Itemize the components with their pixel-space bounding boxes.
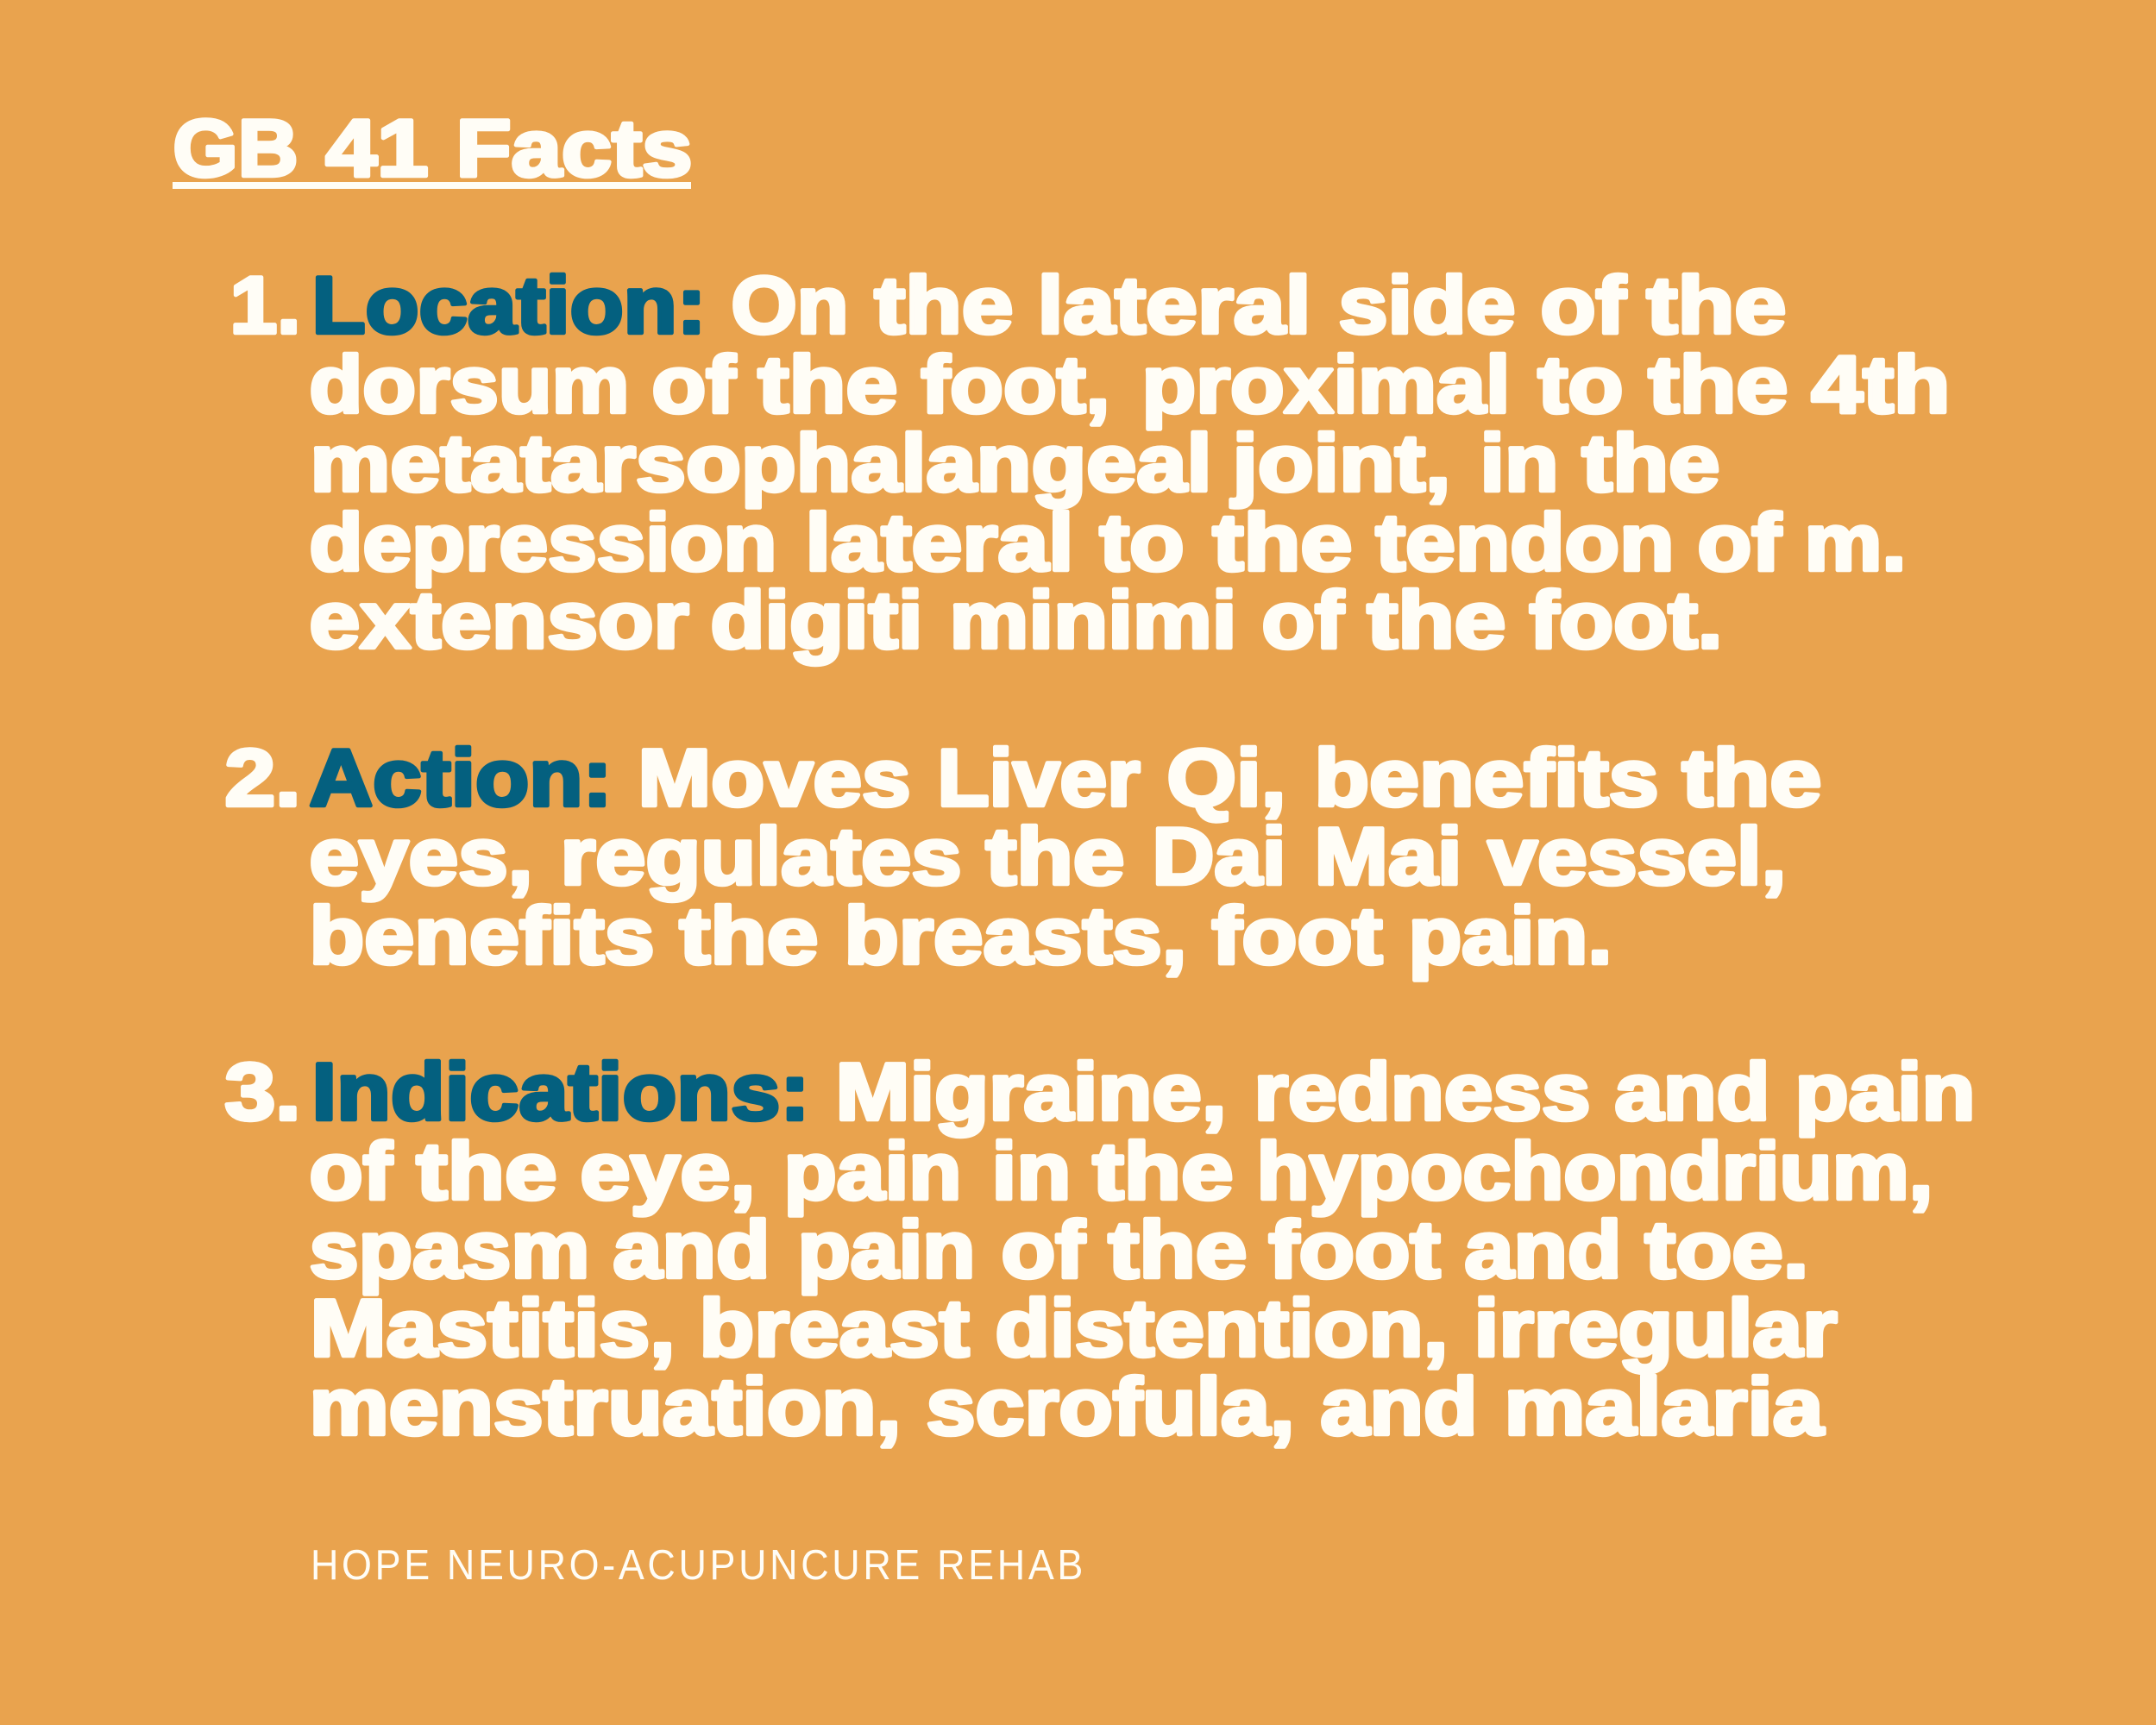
- indications description: irregular: [1474, 1283, 1838, 1373]
- location description: On: [732, 260, 849, 350]
- action description: Liver: [937, 732, 1141, 823]
- location description: lateral: [1037, 260, 1311, 350]
- location description: extensor: [309, 574, 688, 665]
- indications description: distention,: [996, 1283, 1448, 1373]
- action description: benefits: [309, 890, 654, 981]
- title: GB 41 Facts: [173, 103, 692, 193]
- location description: the: [1646, 260, 1786, 350]
- location description: m.: [1805, 497, 1907, 587]
- panel: fact 1 location: [229, 260, 1950, 665]
- title: GB 41 Facts: Facts: [456, 103, 692, 193]
- indications description: malaria: [1505, 1361, 1824, 1452]
- indications description: [309, 1046, 1976, 1452]
- action description: benefits: [1315, 732, 1658, 823]
- number 2: 2.: [224, 732, 300, 823]
- location description: [309, 260, 1950, 665]
- location description: to: [1099, 497, 1184, 587]
- location description: lateral: [806, 497, 1073, 587]
- action description: the: [680, 890, 818, 981]
- number 3: 3.: [224, 1046, 300, 1137]
- title: GB 41 Facts: GB: [173, 103, 299, 193]
- location description: digiti: [711, 574, 923, 665]
- action description: the: [1682, 732, 1822, 823]
- indications description: scrofula,: [927, 1361, 1294, 1452]
- location description: foot.: [1529, 574, 1722, 665]
- panel: fact 3 indications: [224, 1046, 1976, 1452]
- location description: of: [652, 339, 736, 430]
- action description: breasts,: [844, 890, 1187, 981]
- indications description: of: [309, 1126, 393, 1216]
- label: Action: Action:: [309, 732, 613, 823]
- location description: minimi: [949, 574, 1237, 665]
- action description: Mai: [1315, 811, 1461, 901]
- action description: vessel,: [1487, 811, 1786, 901]
- action description: Qi,: [1166, 732, 1285, 823]
- indications description: pain: [797, 1204, 975, 1295]
- indications description: pain: [783, 1126, 961, 1216]
- indications description: the: [416, 1126, 557, 1216]
- location description: the: [1367, 574, 1506, 665]
- location description: joint,: [1230, 417, 1451, 508]
- action description: eyes,: [309, 811, 533, 901]
- indications description: and: [1320, 1361, 1477, 1452]
- indications description: and: [1615, 1046, 1770, 1137]
- indications description: the: [1092, 1126, 1234, 1216]
- indications description: the: [1108, 1204, 1248, 1295]
- indications description: foot: [1268, 1204, 1441, 1295]
- location description: of: [1261, 574, 1344, 665]
- location description: depression: [309, 497, 776, 587]
- location description: of: [1541, 260, 1626, 350]
- label: Location: Location:: [312, 260, 706, 350]
- location description: dorsum: [309, 339, 630, 430]
- indications description: and: [1465, 1204, 1622, 1295]
- location description: metatarsophalangeal: [311, 417, 1211, 508]
- indications description: hypochondrium,: [1256, 1126, 1933, 1216]
- location description: tendon: [1375, 497, 1674, 587]
- action description: pain.: [1408, 890, 1612, 981]
- location description: in: [1480, 417, 1558, 508]
- panel: fact 2 action: [224, 732, 1822, 981]
- location description: of: [1698, 497, 1782, 587]
- indications description: Mastitis,: [311, 1283, 675, 1373]
- indications description: pain: [1795, 1046, 1976, 1137]
- indications description: eye,: [580, 1126, 756, 1216]
- indications description: and: [613, 1204, 770, 1295]
- location description: the: [757, 339, 897, 430]
- location description: foot,: [921, 339, 1109, 430]
- footer: organisation name: HOPE NEURO-ACUPUNCURE REHAB: [311, 1542, 1086, 1589]
- location description: the: [1582, 417, 1720, 508]
- indications description: in: [992, 1126, 1072, 1216]
- title: GB 41 Facts: 41: [326, 103, 428, 193]
- indications description: spasm: [309, 1204, 590, 1295]
- indications description: Migraine,: [835, 1046, 1227, 1137]
- indications description: of: [1001, 1204, 1085, 1295]
- number 1: 1.: [229, 260, 300, 350]
- action description: [309, 732, 1822, 981]
- action description: regulates: [561, 811, 961, 901]
- indications description: breast: [699, 1283, 970, 1373]
- location description: the: [875, 260, 1013, 350]
- action description: foot: [1211, 890, 1382, 981]
- location description: side: [1339, 260, 1515, 350]
- action description: the: [985, 811, 1125, 901]
- label: Indications: Indications:: [312, 1046, 809, 1137]
- location description: to: [1537, 339, 1624, 430]
- action description: Moves: [638, 732, 911, 823]
- location description: 4th: [1812, 339, 1950, 430]
- indications description: redness: [1254, 1046, 1591, 1137]
- indications description: toe.: [1644, 1204, 1808, 1295]
- location description: proximal: [1142, 339, 1510, 430]
- location description: the: [1213, 497, 1353, 587]
- location description: the: [1648, 339, 1788, 430]
- action description: Dai: [1153, 811, 1285, 901]
- indications description: menstruation,: [309, 1361, 901, 1452]
